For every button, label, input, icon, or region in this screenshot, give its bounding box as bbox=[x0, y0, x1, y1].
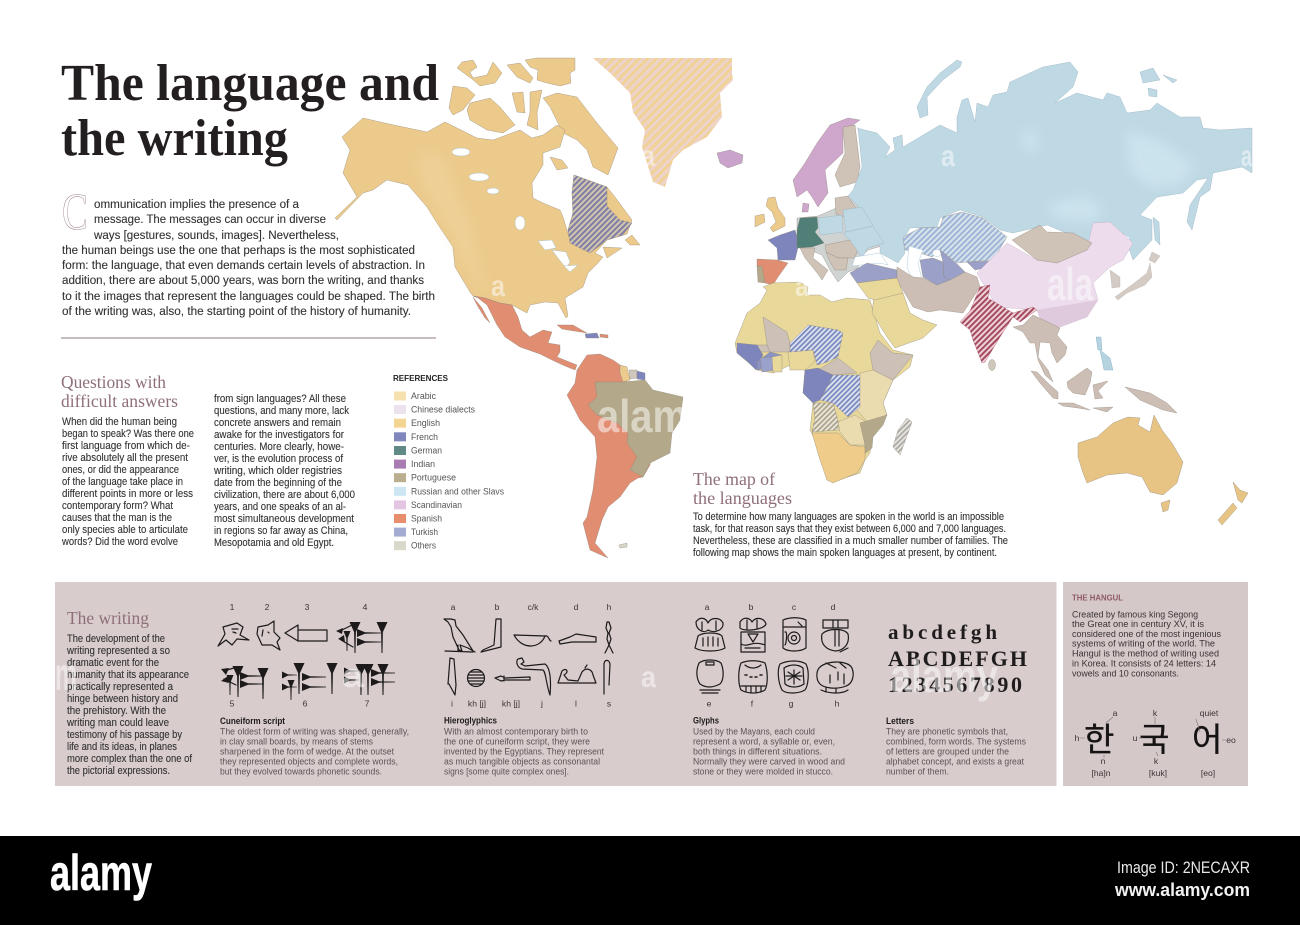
glyph labels: a bbox=[705, 602, 710, 612]
region: Sri Lanka bbox=[988, 360, 996, 370]
text: writing introduction: practically represented a bbox=[67, 681, 174, 693]
hangul examples: n bbox=[1101, 756, 1106, 766]
text column 2: writing, which older registries bbox=[213, 465, 342, 477]
region: France bbox=[768, 230, 799, 260]
hangul examples: k bbox=[1154, 756, 1159, 766]
hieroglyph signs bbox=[444, 619, 613, 695]
caption: glyphs: Glyphs bbox=[693, 716, 719, 726]
region: Sahel, French hatched bbox=[790, 325, 843, 365]
text column 1: When did the human being bbox=[62, 416, 177, 428]
stock watermarks: a bbox=[1241, 140, 1252, 173]
region: Zambia and Zimbabwe bbox=[838, 415, 868, 445]
questions section bbox=[61, 372, 355, 549]
legend: references: Indian bbox=[411, 459, 435, 469]
text: writing introduction: more complex than the one of bbox=[67, 753, 193, 765]
hieroglyph labels: a bbox=[451, 602, 456, 612]
region: Slavic countries and Russia bbox=[818, 60, 1252, 263]
cuneiform labels: 2 bbox=[265, 602, 270, 612]
legend: references: English bbox=[411, 418, 440, 428]
hangul examples bbox=[1075, 708, 1236, 778]
drop capital: C bbox=[62, 184, 88, 241]
caption: glyphs: Normally they were carved in wood and bbox=[693, 756, 845, 768]
legend: references: Arabic bbox=[411, 391, 436, 401]
stock watermarks bbox=[55, 140, 1252, 702]
sign 7: wedges bbox=[344, 664, 395, 695]
hieroglyph labels: kh [j] bbox=[502, 698, 520, 708]
text column 2: concrete answers and remain bbox=[214, 417, 341, 429]
glyph h bbox=[817, 662, 853, 693]
heading: the writing: The writing bbox=[67, 608, 149, 628]
map text block: task, for that reason says that they exist between 6,000 and 7,000 languages. bbox=[693, 523, 1006, 535]
title bbox=[61, 55, 439, 167]
hangul examples: [kuk] bbox=[1149, 768, 1167, 778]
region: Brazil, Portuguese bbox=[588, 380, 683, 477]
intro text block: to it the images that represent the languages could be shaped. The birth bbox=[62, 289, 435, 303]
region: Mozambique, Portuguese bbox=[860, 415, 887, 455]
hieroglyph labels: s bbox=[607, 698, 611, 708]
hangul examples: [eo] bbox=[1201, 768, 1215, 778]
sign: twisted rope bbox=[605, 622, 613, 653]
sign 6: wedges bbox=[282, 663, 338, 700]
hangul examples: u bbox=[1133, 733, 1138, 743]
glyph labels: e bbox=[707, 698, 712, 708]
stock watermarks: m bbox=[55, 648, 77, 700]
cuneiform labels: 4 bbox=[363, 602, 368, 612]
region: North America, English bbox=[335, 58, 640, 318]
sign 2: head bbox=[257, 621, 280, 650]
text: writing introduction bbox=[66, 633, 193, 777]
hangul examples: 국 bbox=[1139, 713, 1169, 761]
text: writing introduction: the prehistory. With the bbox=[67, 705, 166, 717]
glyph labels: b bbox=[749, 602, 754, 612]
caption: cuneiform script: sharpened in the form of wedge. At the outset bbox=[220, 746, 394, 758]
text: writing introduction: testimony of his passage by bbox=[67, 729, 182, 741]
glyph labels: g bbox=[789, 698, 794, 708]
text: hangul description: systems of writing of the world. The bbox=[1072, 638, 1215, 650]
footer logo: alamy bbox=[50, 845, 152, 901]
panel: the writing bbox=[55, 582, 1056, 786]
text: hangul description: vowels and 10 consonants. bbox=[1072, 668, 1179, 680]
caption: cuneiform script: in clay small boards, by means of stems bbox=[220, 736, 373, 748]
region: Quebec, French hatched bbox=[568, 175, 632, 253]
cuneiform labels: 7 bbox=[365, 698, 370, 708]
relief tint: Siberia bbox=[1022, 128, 1195, 222]
text: hangul description bbox=[1072, 610, 1221, 680]
region: Falkland islands bbox=[619, 543, 627, 548]
glyph d bbox=[822, 620, 848, 652]
text column 1: only species able to articulate bbox=[62, 524, 188, 536]
text column 1 bbox=[61, 416, 194, 548]
map text block bbox=[693, 469, 1008, 559]
map text block: Nevertheless, these are classified in a much smaller number of families. The bbox=[693, 535, 1008, 547]
text column 1: contemporary form? What bbox=[62, 500, 173, 512]
caption: hieroglyphics: invented by the Egyptians. They represent bbox=[444, 746, 604, 758]
glyph b bbox=[740, 618, 766, 652]
caption: letters: Letters bbox=[886, 716, 914, 727]
region: UK and Ireland, English bbox=[755, 197, 785, 232]
website: www.alamy.com bbox=[1114, 880, 1250, 900]
hangul examples: quiet bbox=[1200, 708, 1219, 718]
hieroglyph labels: l bbox=[575, 698, 577, 708]
caption: glyphs: both things in different situations. bbox=[693, 746, 822, 758]
region: China, Chinese dialects bbox=[977, 222, 1133, 327]
caption: hieroglyphics: Hieroglyphics bbox=[444, 716, 497, 726]
hangul examples: eo bbox=[1226, 735, 1236, 745]
stock watermarks: alamy bbox=[890, 650, 998, 702]
region: Greenland, hatched bbox=[593, 58, 733, 187]
inland seas bbox=[852, 246, 942, 281]
region: Spain bbox=[757, 259, 788, 285]
region: Madagascar, hatched bbox=[893, 418, 912, 455]
glyph labels: d bbox=[831, 602, 836, 612]
text column 1: began to speak? Was there one bbox=[62, 428, 194, 440]
text column 2: awake for the investigators for bbox=[214, 429, 344, 441]
caption: letters bbox=[886, 716, 1026, 778]
cuneiform labels: 1 bbox=[230, 602, 235, 612]
region: French Guiana bbox=[637, 371, 645, 380]
image id: Image ID: 2NECAXR bbox=[1117, 858, 1250, 877]
map text block: following map shows the main spoken languages at present, by continent. bbox=[693, 547, 997, 559]
text: writing introduction: writing man could leave bbox=[66, 717, 169, 729]
glyph labels bbox=[705, 602, 840, 708]
region: Southern Europe and others bbox=[800, 125, 860, 280]
map text block: To determine how many languages are spoken in the world is an impossible bbox=[693, 511, 1004, 523]
cuneiform signs bbox=[218, 621, 395, 700]
region: West Africa, French bbox=[737, 343, 833, 403]
region: Korea and Japan bbox=[1110, 252, 1160, 300]
heading: questions bbox=[61, 372, 178, 411]
inland lakes bbox=[452, 148, 578, 272]
caption: hieroglyphics: as much tangible objects as consonantal bbox=[444, 756, 600, 768]
caption: glyphs: stone or they were molded in stucco. bbox=[693, 766, 833, 778]
legend: references: Portuguese bbox=[411, 473, 456, 483]
region: India, hatched bbox=[960, 285, 1037, 363]
text column 1: first language from which de- bbox=[62, 440, 190, 452]
heading: questions: difficult answers bbox=[61, 391, 178, 411]
text column 1: rive absolutely all the present bbox=[62, 452, 188, 464]
text column 2: Mesopotamia and old Egypt. bbox=[214, 537, 334, 549]
stock watermarks: a bbox=[491, 270, 505, 303]
caption: cuneiform script: The oldest form of writing was shaped, generally, bbox=[220, 726, 409, 738]
text column 1: of the language take place in bbox=[62, 476, 183, 488]
hieroglyph labels: j bbox=[540, 698, 543, 708]
sign: animal belly bbox=[495, 676, 530, 681]
glyph labels: h bbox=[835, 698, 840, 708]
stock watermarks: a bbox=[941, 140, 955, 173]
text: writing introduction: hinge between history and bbox=[67, 693, 178, 705]
text column 2: civilization, there are about 6,000 bbox=[214, 489, 355, 501]
text column 2: most simultaneous development bbox=[214, 513, 354, 525]
region: Angola, Portuguese hatched bbox=[812, 403, 838, 432]
region: Scandinavia bbox=[793, 118, 860, 207]
text column 1: words? Did the word evolve bbox=[61, 536, 178, 548]
region: Arabic-speaking areas bbox=[857, 278, 937, 423]
intro text block: of the writing was, also, the starting point of the history of humanity. bbox=[62, 304, 411, 318]
caption: letters: They are phonetic symbols that, bbox=[886, 726, 1008, 738]
hieroglyph labels: h bbox=[607, 602, 612, 612]
cuneiform labels: 3 bbox=[305, 602, 310, 612]
intro text block: ways [gestures, sounds, images]. Nevertheless, bbox=[93, 228, 339, 242]
text: writing introduction: humanity that its appearance bbox=[67, 669, 189, 681]
region: Africa base bbox=[735, 282, 913, 482]
legend: references: French bbox=[411, 432, 438, 442]
caption: letters: combined, form words. The systems bbox=[886, 736, 1026, 748]
text: hangul description: in Korea. It consists of 24 letters: 14 bbox=[1072, 658, 1217, 670]
stock watermarks: a bbox=[641, 661, 656, 694]
caption: cuneiform script: but they evolved towards phonetic sounds. bbox=[220, 766, 382, 778]
stock watermarks: alam bbox=[597, 390, 688, 442]
stock watermarks: ala bbox=[1047, 258, 1093, 310]
caption: letters: alphabet concept, and exists a great bbox=[886, 756, 1024, 768]
text column 2 bbox=[213, 393, 355, 549]
sign: basin bbox=[514, 635, 551, 646]
region: Middle East and South Asia, other bbox=[897, 267, 980, 313]
sign 1: head bbox=[218, 623, 249, 646]
world language map bbox=[335, 58, 1252, 558]
text column 2: years, and one speaks of an al- bbox=[214, 501, 346, 513]
hangul examples: a bbox=[1113, 708, 1118, 718]
glyph labels: c bbox=[792, 602, 797, 612]
text column 1: causes that the man is the bbox=[62, 512, 172, 524]
intro text block bbox=[62, 184, 435, 318]
caption: glyphs: Used by the Mayans, each could bbox=[693, 726, 815, 738]
intro text block: form: the language, that even demands certain levels of abstraction. In bbox=[62, 258, 425, 272]
heading: the map of the languages: the languages bbox=[693, 488, 792, 508]
text: writing introduction: dramatic event for the bbox=[67, 657, 159, 669]
sign: snake bbox=[517, 658, 550, 695]
legend: references bbox=[393, 373, 504, 551]
hangul examples: h bbox=[1075, 733, 1080, 743]
sign: reed bbox=[448, 658, 456, 695]
caption: hieroglyphics bbox=[444, 716, 604, 778]
intro text block: message. The messages can occur in diverse bbox=[94, 212, 326, 226]
caption: cuneiform script: Cuneiform script bbox=[220, 716, 286, 727]
hieroglyph labels: d bbox=[574, 602, 579, 612]
stock watermarks: a bbox=[795, 270, 809, 303]
sign: hand bbox=[559, 634, 596, 644]
cuneiform labels bbox=[230, 602, 370, 708]
legend: references: Scandinavian bbox=[411, 500, 462, 510]
caption: hieroglyphics: the one of cuneiform script, they were bbox=[444, 736, 590, 748]
sign: foot bbox=[481, 619, 501, 652]
letter samples: ABCDEFGH bbox=[888, 646, 1027, 671]
cuneiform labels: 5 bbox=[230, 698, 235, 708]
hangul examples: k bbox=[1153, 708, 1158, 718]
sign 4: wedges bbox=[336, 622, 388, 653]
stock watermarks: a bbox=[342, 657, 365, 695]
legend: references: Chinese dialects bbox=[411, 404, 475, 414]
text column 1: ones, or did the appearance bbox=[62, 464, 179, 476]
glyph labels: f bbox=[751, 698, 754, 708]
panel: the hangul bbox=[1063, 582, 1248, 786]
letter samples bbox=[888, 620, 1027, 697]
region: Hispaniola, French bbox=[585, 333, 599, 338]
caption: cuneiform script bbox=[220, 716, 409, 778]
text column 2: questions, and many more, lack bbox=[214, 405, 349, 417]
region: West and Central Africa, other bbox=[740, 317, 913, 380]
caption: hieroglyphics: signs [some quite complex ones]. bbox=[444, 766, 569, 778]
hangul examples: 어 bbox=[1192, 713, 1222, 761]
heading: the map of the languages: The map of bbox=[693, 469, 775, 489]
heading: the map of the languages bbox=[693, 469, 792, 508]
sign 3: arrow bbox=[285, 625, 327, 641]
glyph g bbox=[778, 661, 808, 693]
region: Southeast Asia, other bbox=[1013, 315, 1177, 413]
heading: the hangul: THE HANGUL bbox=[1072, 592, 1123, 602]
intro text block: addition, there are about 5,000 years, was born the writing, and thanks bbox=[62, 273, 424, 287]
caption: letters: number of them. bbox=[886, 766, 949, 778]
text: writing introduction: The development of the bbox=[67, 633, 165, 645]
relief tint: Rocky Mountains bbox=[420, 150, 490, 288]
stock watermarks: a bbox=[641, 140, 655, 173]
text column 2: in regions so far away as China, bbox=[214, 525, 348, 537]
footer band bbox=[0, 836, 1300, 925]
sign: vulture bbox=[444, 619, 475, 652]
text: hangul description: Created by famous king Segong bbox=[1072, 610, 1198, 620]
hieroglyph labels: b bbox=[495, 602, 500, 612]
region: Mexico and Central America, Spanish bbox=[473, 296, 608, 370]
sign: folded cloth bbox=[604, 660, 610, 694]
region: Suriname, other bbox=[629, 370, 637, 379]
text: hangul description: the Great one in century XV, it is bbox=[1072, 619, 1204, 630]
legend: references: Others bbox=[411, 541, 436, 551]
hieroglyph labels: kh [j] bbox=[468, 698, 486, 708]
text: writing introduction: life and its ideas, in planes bbox=[67, 741, 177, 753]
text column 2: from sign languages? All these bbox=[214, 393, 346, 405]
intro text block: the human beings use the one that perhaps is the most sophisticated bbox=[62, 243, 415, 257]
glyph f bbox=[739, 661, 767, 693]
text column 1: different points in more or less bbox=[62, 488, 193, 500]
legend: references: Spanish bbox=[411, 514, 442, 524]
text column 2: date from the beginning of the bbox=[214, 477, 342, 489]
caption: cuneiform script: they represented objects and complete words, bbox=[220, 756, 398, 768]
text: writing introduction: writing represented a so bbox=[66, 645, 170, 657]
hieroglyph labels bbox=[451, 602, 612, 708]
sign 5: wedges bbox=[221, 666, 268, 699]
hangul examples: 한 bbox=[1084, 713, 1114, 761]
letter samples: abcdefgh bbox=[888, 620, 997, 644]
title: the writing bbox=[61, 110, 288, 167]
text column 2: ver, is the evolution process of bbox=[214, 453, 344, 465]
caption: letters: of letters are grouped under the bbox=[886, 746, 1009, 758]
sign: lion bbox=[558, 665, 596, 683]
region: Australia and New Zealand, English bbox=[1078, 415, 1248, 525]
hieroglyph labels: i bbox=[451, 698, 453, 708]
glyph e bbox=[697, 660, 723, 693]
legend: references: Turkish bbox=[411, 527, 438, 537]
heading: questions: Questions with bbox=[61, 372, 166, 392]
region: Southern Africa, English bbox=[812, 433, 865, 483]
region: Central and Eastern Europe base bbox=[797, 195, 885, 282]
glyph a bbox=[695, 618, 725, 651]
region: Mongolia bbox=[1012, 225, 1092, 263]
region: Kazakhstan, hatched bbox=[903, 212, 1007, 263]
caption: glyphs: represent a word, a syllable or, even, bbox=[693, 736, 835, 748]
region: Guyana, English bbox=[620, 365, 630, 382]
title: The language and bbox=[61, 55, 439, 112]
caption: glyphs bbox=[693, 716, 845, 778]
legend: references: German bbox=[411, 446, 442, 456]
glyph c bbox=[783, 618, 806, 651]
sign: placenta bbox=[468, 670, 484, 686]
hieroglyph labels: c/k bbox=[528, 602, 539, 612]
legend: references: REFERENCES bbox=[393, 373, 448, 383]
region: Iceland bbox=[717, 150, 743, 168]
region: South America, Spanish bbox=[567, 354, 660, 558]
hangul examples: [ha]n bbox=[1091, 768, 1111, 778]
region: Congo, French hatched bbox=[820, 375, 860, 417]
region: Portugal bbox=[757, 266, 765, 283]
text: hangul description: considered one of the most ingenious bbox=[1072, 629, 1221, 640]
letter samples: 1234567890 bbox=[888, 672, 1022, 697]
region: Central Asia and Turkey, Turkish bbox=[850, 250, 995, 285]
region: Germany bbox=[797, 217, 824, 248]
region: Philippines bbox=[1096, 337, 1113, 370]
caption: hieroglyphics: With an almost contemporary birth to bbox=[444, 726, 588, 738]
text: writing introduction: the pictorial expressions. bbox=[67, 765, 170, 777]
text column 2: centuries. More clearly, howe- bbox=[214, 441, 344, 453]
text: hangul description: Hangul is the method of writing used bbox=[1072, 648, 1219, 660]
region: Ghana and Nigeria bbox=[772, 350, 815, 372]
legend: references: Russian and other Slavs bbox=[411, 486, 504, 496]
cuneiform labels: 6 bbox=[303, 698, 308, 708]
Mayan glyphs bbox=[695, 618, 853, 693]
intro text block: ommunication implies the presence of a bbox=[94, 197, 299, 211]
